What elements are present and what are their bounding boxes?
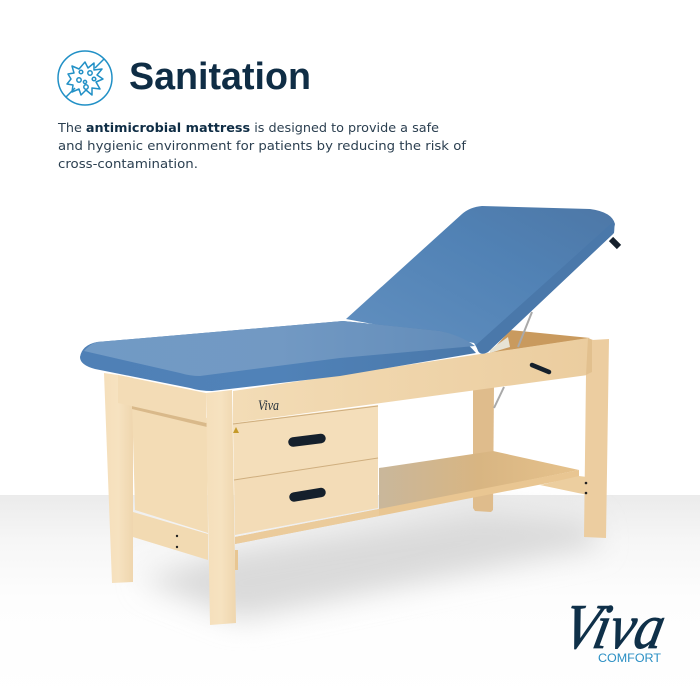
shelf top and front edge xyxy=(235,451,579,544)
hinge bracket xyxy=(490,337,510,353)
side panel xyxy=(132,400,208,533)
front right leg xyxy=(584,339,609,538)
treatment table xyxy=(80,206,619,625)
drawer: top xyxy=(233,405,378,480)
logo: Viva Comfort: COMFORT xyxy=(598,651,662,665)
icon: crossed-out microbe xyxy=(58,51,112,105)
leg bracket holes xyxy=(585,482,587,494)
text block: description xyxy=(57,120,467,171)
top side rail xyxy=(118,375,206,423)
panel shadow xyxy=(132,404,207,427)
text block: description: cross-contamination. xyxy=(58,156,198,171)
logo: Viva Comfort: Viva xyxy=(557,591,672,662)
small logo on rail: Viva xyxy=(258,398,279,414)
gas spring xyxy=(494,312,532,408)
floor shadow xyxy=(140,510,600,620)
drawer gaps xyxy=(233,406,378,480)
flat cushion xyxy=(80,321,476,391)
backrest cushion xyxy=(346,206,615,354)
title: Sanitation xyxy=(129,56,311,98)
side rail holes xyxy=(176,535,178,548)
inner frame of raised section xyxy=(490,330,590,353)
headrest handle xyxy=(611,239,619,247)
stub of rail xyxy=(235,550,238,570)
under-drawer rail xyxy=(235,509,379,544)
floor background xyxy=(0,495,700,700)
adjustment knob xyxy=(532,365,549,372)
drawer handle: top xyxy=(293,438,321,442)
left rear leg xyxy=(104,373,133,583)
text block: description: The antimicrobial mattress is designed to provide a safe xyxy=(57,120,439,135)
front left leg xyxy=(206,390,236,625)
lower side rail xyxy=(133,512,208,560)
rail end strip xyxy=(586,338,593,375)
warning label xyxy=(233,427,239,433)
text block: description: and hygienic environment for patients by reducing the risk of xyxy=(58,138,467,153)
drawer handle: bottom xyxy=(294,492,321,497)
front rail xyxy=(233,338,588,423)
drawer: bottom xyxy=(234,458,378,535)
right rear leg xyxy=(473,386,494,512)
shelf bracket xyxy=(540,476,588,495)
